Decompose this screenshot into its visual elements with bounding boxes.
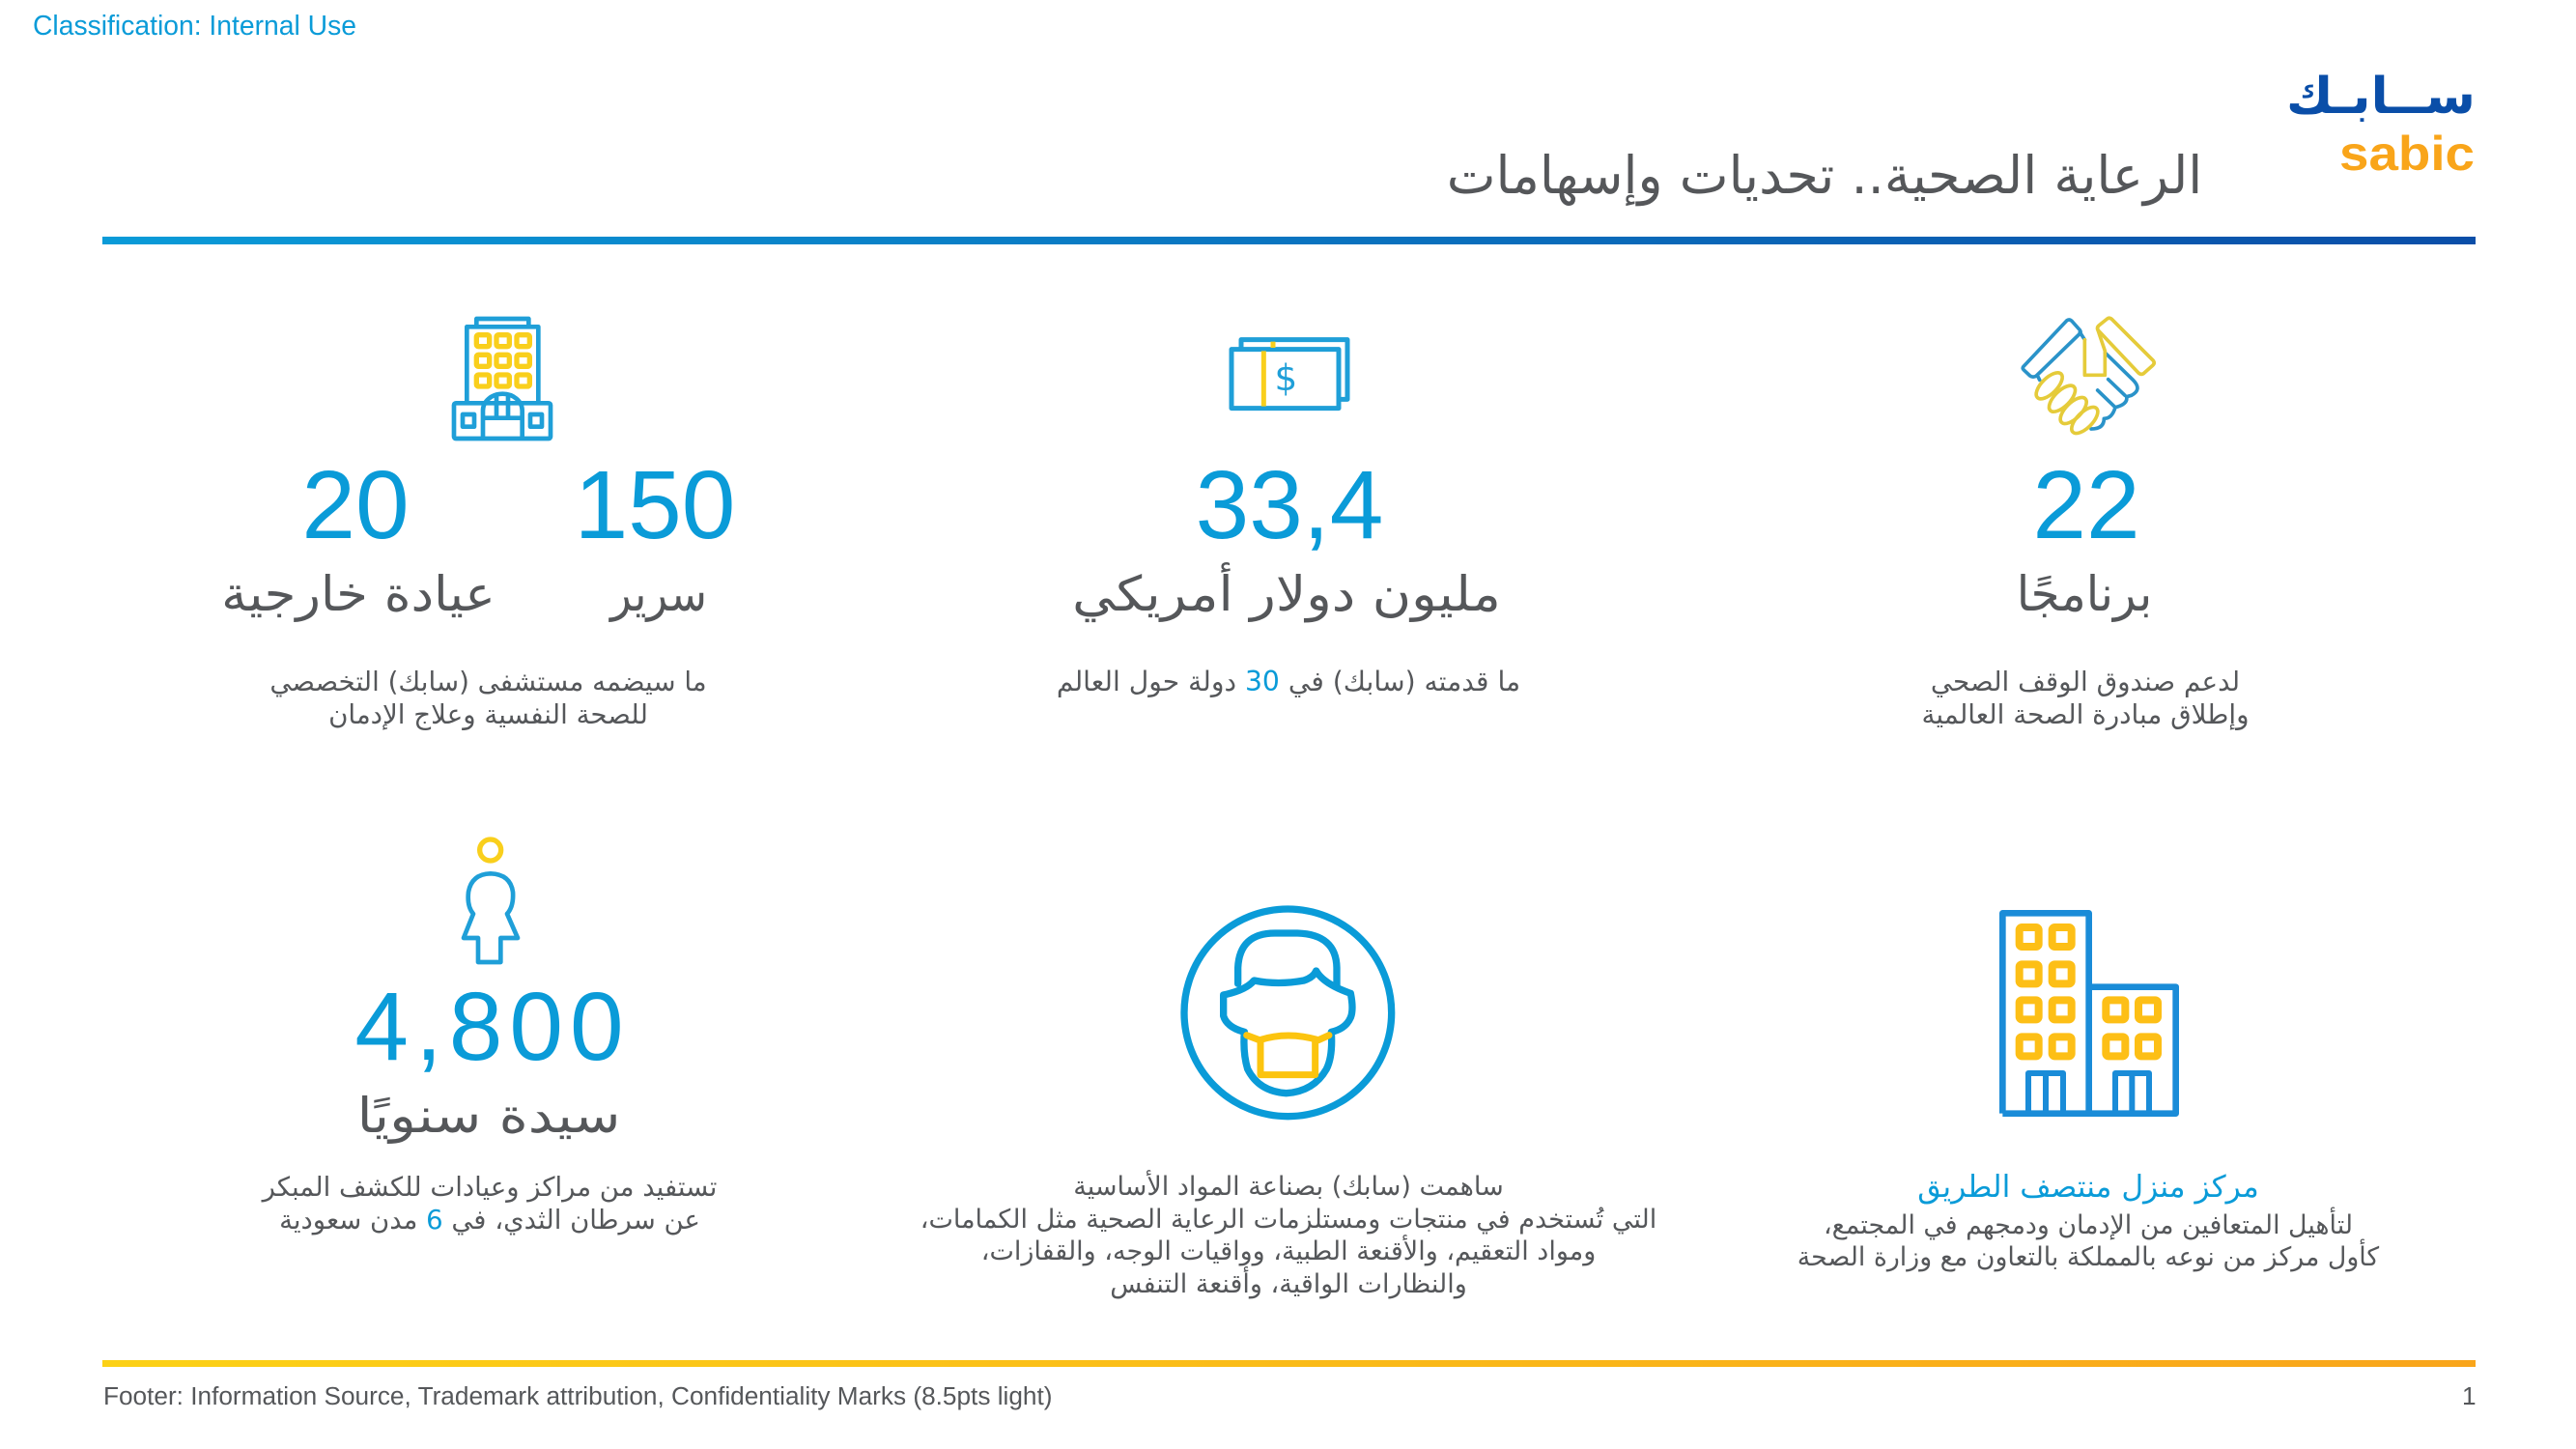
stat: 20: 20 [301, 451, 410, 559]
description: ما سيضمه مستشفى (سابك) التخصصي [269, 666, 707, 697]
icon: money [1229, 337, 1350, 412]
description: التي تُستخدم في منتجات ومستلزمات الرعاية الصحية مثل الكمامات، [920, 1205, 1656, 1235]
title: الرعاية الصحية.. تحديات وإسهامات [1447, 145, 2202, 206]
label: programs: برنامجًا [2017, 566, 2152, 622]
stat: 150: 150 [575, 451, 735, 559]
panel: materials [920, 905, 1656, 1299]
stat: 4,800: 4,800 [354, 973, 631, 1081]
header rule [102, 237, 2476, 244]
stat: 22: 22 [2032, 451, 2140, 559]
description: والنظارات الواقية، وأقنعة التنفس [1110, 1269, 1467, 1299]
panel: hospital [221, 317, 735, 730]
description [1798, 1208, 2380, 1272]
footer rule [102, 1360, 2476, 1367]
description: عن سرطان الثدي، في 6 مدن سعودية [279, 1205, 700, 1236]
description: ما قدمته (سابك) في 30 دولة حول العالم [1057, 666, 1520, 697]
footer text: Footer: Information Source, Trademark attribution, Confidentiality Marks (8.5pts light) [103, 1381, 1052, 1410]
icon: handshake [2021, 316, 2156, 435]
description: للصحة النفسية وعلاج الإدمان [328, 698, 648, 730]
icon: money: $ [1274, 356, 1297, 399]
logo: sabic: ســابـك [2286, 68, 2476, 126]
icon: hospital [452, 317, 552, 440]
icon: buildings [1999, 910, 2179, 1117]
stat: 33,4: 33,4 [1196, 451, 1383, 559]
description: تستفيد من مراكز وعيادات للكشف المبكر [263, 1172, 717, 1203]
icon: woman [462, 837, 520, 964]
classification label: Classification: Internal Use [33, 10, 356, 41]
label: beds: سرير [610, 566, 706, 622]
heading: rehab center: مركز منزل منتصف الطريق [1917, 1170, 2259, 1205]
page number: 1 [2462, 1381, 2477, 1410]
description [1921, 666, 2250, 730]
logo: sabic: sabic [2339, 127, 2475, 181]
label: women annually: سيدة سنويًا [356, 1088, 620, 1144]
description: لدعم صندوق الوقف الصحي [1931, 666, 2240, 697]
description [269, 666, 707, 730]
label: clinics: عيادة خارجية [221, 566, 495, 622]
description [920, 1170, 1656, 1299]
description: كأول مركز من نوعه بالمملكة بالتعاون مع وزارة الصحة [1798, 1242, 2379, 1272]
panel: programs [1921, 316, 2250, 730]
panel: rehab center [1798, 910, 2380, 1272]
description: ساهمت (سابك) بصناعة المواد الأساسية [1073, 1172, 1504, 1202]
description: وإطلاق مبادرة الصحة العالمية [1921, 698, 2250, 730]
description: ومواد التعقيم، والأقنعة الطبية، وواقيات الوجه، والقفازات، [981, 1236, 1596, 1266]
description: لتأهيل المتعافين من الإدمان ودمجهم في المجتمع، [1824, 1210, 2353, 1240]
panel: women [261, 837, 717, 1236]
panel: funding [1057, 337, 1520, 697]
label: million dollars: مليون دولار أمريكي [1072, 566, 1501, 622]
description [261, 1172, 717, 1236]
icon: masked face [1180, 905, 1395, 1121]
